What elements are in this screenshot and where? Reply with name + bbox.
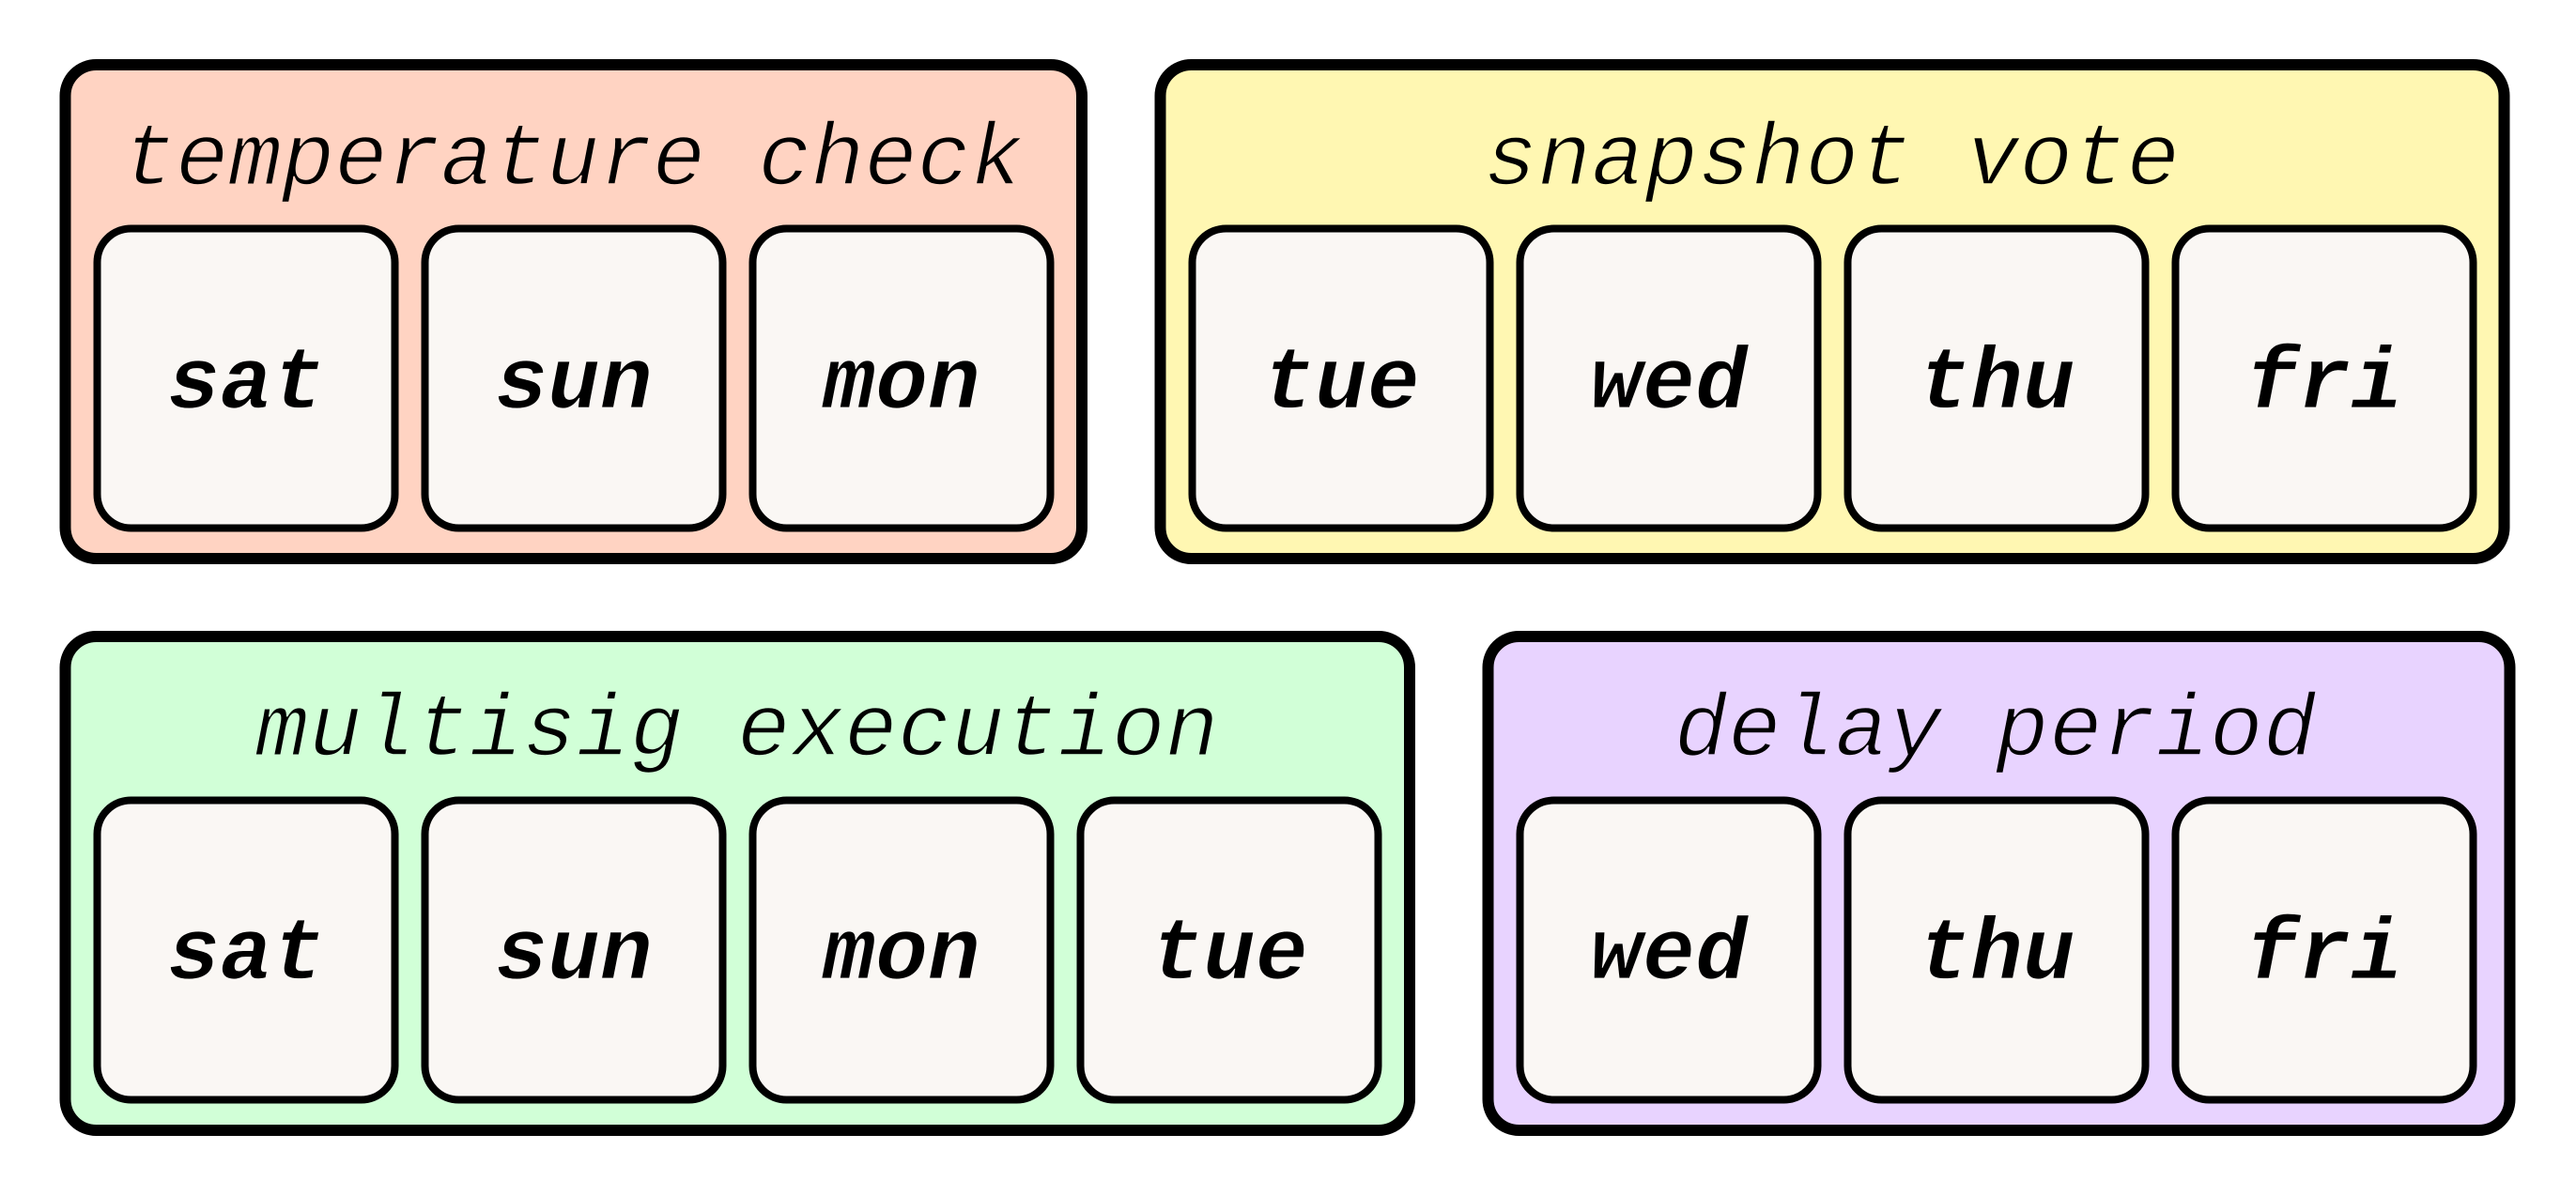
- day tile: mon: [753, 229, 1050, 528]
- panel: snapshot vote: [1161, 65, 2504, 559]
- day tile: fri: [2175, 800, 2474, 1100]
- day tile: tue: tue: [1150, 906, 1308, 1004]
- day tile: mon: [753, 800, 1050, 1100]
- day tile: sun: sun: [495, 906, 653, 1004]
- day tile: mon: mon: [821, 335, 980, 434]
- day tile: wed: wed: [1590, 335, 1750, 434]
- day tile: fri: fri: [2245, 906, 2403, 1004]
- day tile: sat: sat: [167, 335, 325, 434]
- heading: delay period: delay period: [1674, 682, 2317, 782]
- heading: snapshot vote: snapshot vote: [1484, 112, 2181, 211]
- day tile: fri: fri: [2245, 335, 2403, 434]
- day tile: sun: [424, 229, 723, 528]
- day tile: fri: [2175, 229, 2474, 528]
- day tile: tue: [1193, 229, 1489, 528]
- day tile: sun: sun: [495, 335, 653, 434]
- panel: delay period: [1488, 636, 2509, 1130]
- panel: multisig execution: [66, 636, 1410, 1130]
- day tile: sun: [424, 800, 723, 1100]
- day tile: sat: sat: [167, 906, 325, 1004]
- day tile: mon: mon: [821, 906, 980, 1004]
- day tile: thu: thu: [1918, 335, 2075, 434]
- heading: temperature check: temperature check: [123, 112, 1023, 211]
- day tile: wed: [1519, 229, 1818, 528]
- heading: multisig execution: multisig execution: [255, 682, 1219, 782]
- day tile: thu: [1848, 229, 2145, 528]
- day tile: wed: [1519, 800, 1818, 1100]
- day tile: sat: [98, 800, 394, 1100]
- day tile: sat: [98, 229, 394, 528]
- day tile: wed: wed: [1590, 906, 1750, 1004]
- day tile: tue: [1080, 800, 1379, 1100]
- day tile: tue: tue: [1262, 335, 1420, 434]
- day tile: thu: thu: [1918, 906, 2075, 1004]
- panel: temperature check: [66, 65, 1082, 559]
- day tile: thu: [1848, 800, 2145, 1100]
